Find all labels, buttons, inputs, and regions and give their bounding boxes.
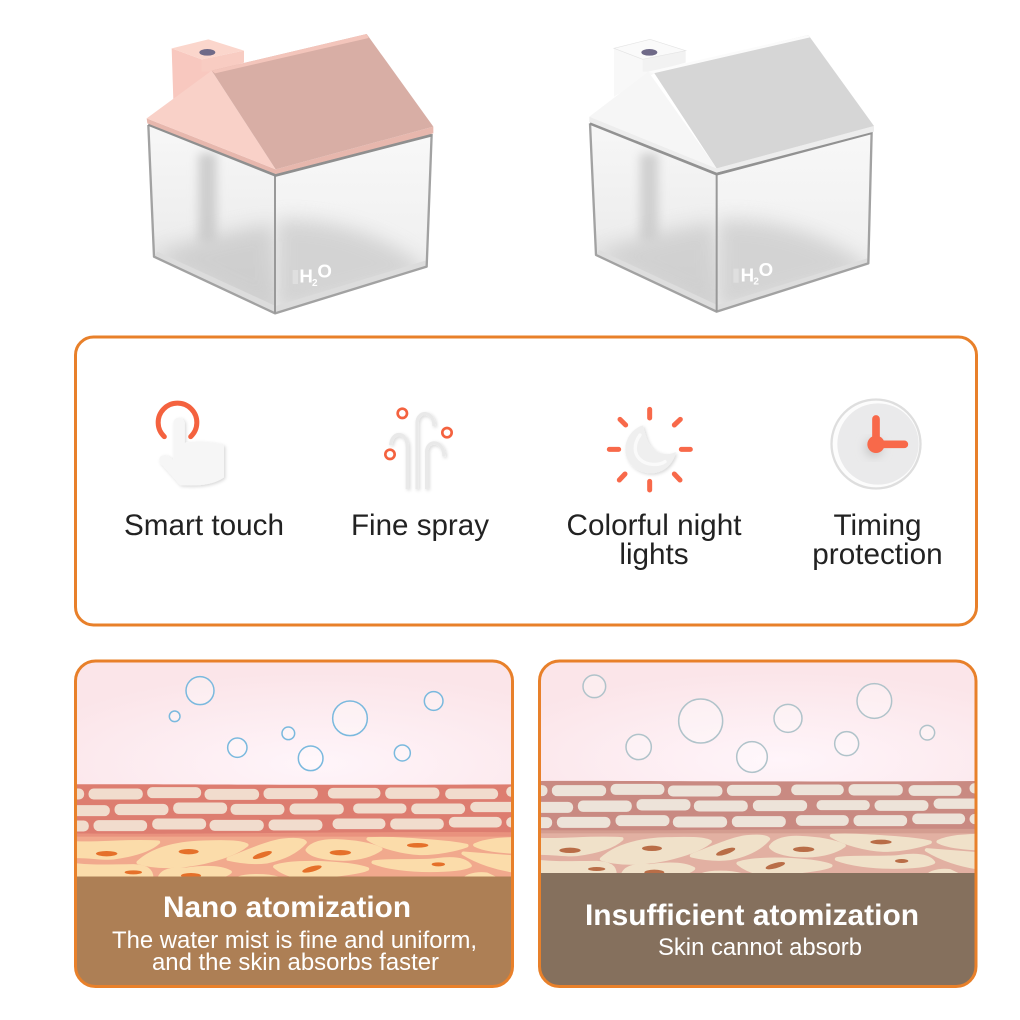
icon: clock	[830, 398, 922, 490]
feature: fine spray	[351, 409, 489, 542]
heading: insufficient atomization: Insufficient atomization	[585, 899, 919, 932]
icon: touch hand	[158, 403, 224, 485]
chimney	[614, 39, 686, 97]
water droplets	[169, 677, 443, 771]
panel: features	[76, 337, 976, 625]
label: colorful night lights: Colorful night	[567, 509, 742, 542]
H2O label: 2	[753, 277, 759, 288]
skin background	[539, 660, 977, 785]
roof	[147, 34, 433, 175]
H2O label: 2	[312, 278, 318, 289]
product photo: white house humidifier	[589, 35, 874, 312]
label: colorful night lights: lights	[619, 538, 689, 571]
label: fine spray: Fine spray	[351, 509, 489, 542]
skin layers illustration	[533, 781, 983, 875]
panel: nano atomization	[70, 660, 520, 988]
label: smart touch: Smart touch	[124, 509, 284, 542]
panel: insufficient atomization	[533, 660, 983, 988]
product photo: pink house humidifier	[147, 34, 433, 313]
H2O label: H	[741, 264, 754, 285]
tank body	[590, 123, 872, 312]
tank body	[148, 125, 432, 313]
H2O label	[733, 259, 773, 288]
H2O label: O	[759, 259, 773, 280]
icon: moon and rays	[609, 409, 690, 490]
roof	[589, 35, 874, 174]
label: timing protection: Timing	[834, 509, 921, 542]
skin background	[75, 660, 513, 790]
icon: spray	[385, 409, 452, 489]
chimney	[172, 39, 244, 100]
H2O label	[293, 260, 332, 289]
label: timing protection: protection	[812, 538, 943, 571]
feature: timing protection	[812, 398, 943, 571]
feature: smart touch	[124, 403, 284, 542]
caption band	[539, 873, 977, 988]
water droplets	[583, 675, 935, 772]
text: nano description: and the skin absorbs faster	[152, 949, 439, 976]
heading: nano atomization: Nano atomization	[163, 891, 411, 924]
text: nano description: The water mist is fine and uniform,	[112, 927, 477, 954]
H2O label: O	[317, 260, 332, 281]
H2O label: H	[299, 266, 313, 287]
caption band	[75, 876, 513, 988]
feature: colorful night lights	[567, 409, 742, 571]
text: insufficient description: Skin cannot absorb	[658, 934, 862, 961]
skin layers illustration	[70, 784, 520, 878]
